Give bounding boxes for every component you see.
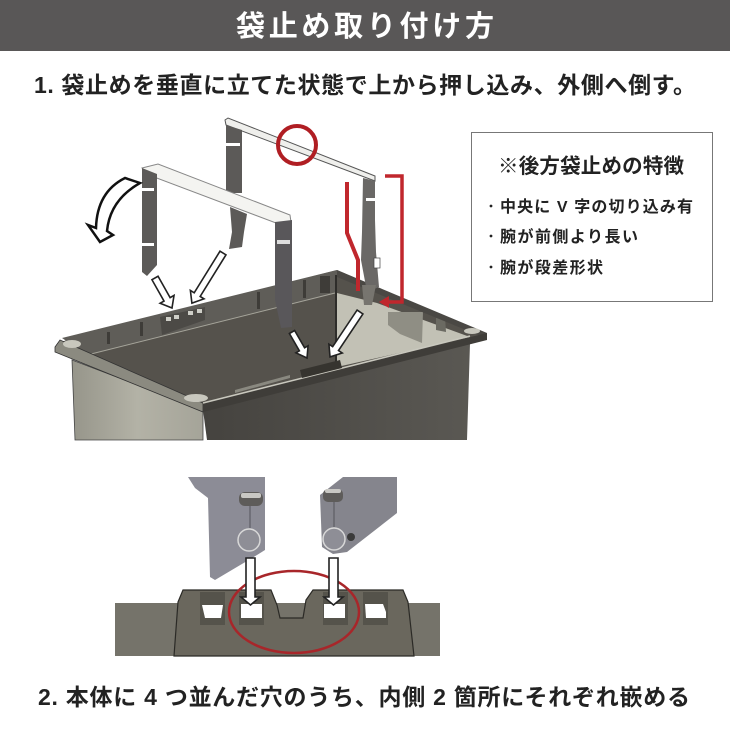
title: 袋止め取り付け方: [236, 10, 494, 43]
title banner: [0, 0, 730, 51]
panel heading: ※後方袋止めの特徴: [498, 155, 684, 178]
red stepped line: [347, 182, 358, 291]
red ellipse: [229, 571, 359, 653]
slotted rim: [115, 590, 440, 656]
red bracket arrow: [379, 176, 402, 308]
step 1 heading: 1. 袋止めを垂直に立てた状態で上から押し込み、外側へ倒す。: [34, 72, 696, 98]
down arrows: [241, 558, 343, 605]
left tab: [188, 477, 265, 580]
right tab: [320, 477, 397, 554]
back stopper frame: [225, 118, 380, 305]
feature list: 腕が前側より長い: [500, 227, 638, 246]
step 2 heading: 2. 本体に 4 つ並んだ穴のうち、内側 2 箇所にそれぞれ嵌める: [38, 684, 690, 710]
feature list: 腕が段差形状: [500, 258, 603, 277]
diagram: bin with bag stoppers: [55, 118, 487, 440]
panel: rear stopper features: [472, 132, 712, 302]
feature list: 中央に V 字の切り込み有: [500, 198, 693, 216]
callout circle: [278, 126, 316, 164]
feature list: [490, 198, 693, 277]
curved arrow: [88, 178, 140, 242]
arrows into slots: [148, 249, 367, 361]
front stopper frame: [142, 164, 292, 328]
bin body: [55, 270, 487, 440]
diagram: slot close-up: [115, 477, 440, 656]
